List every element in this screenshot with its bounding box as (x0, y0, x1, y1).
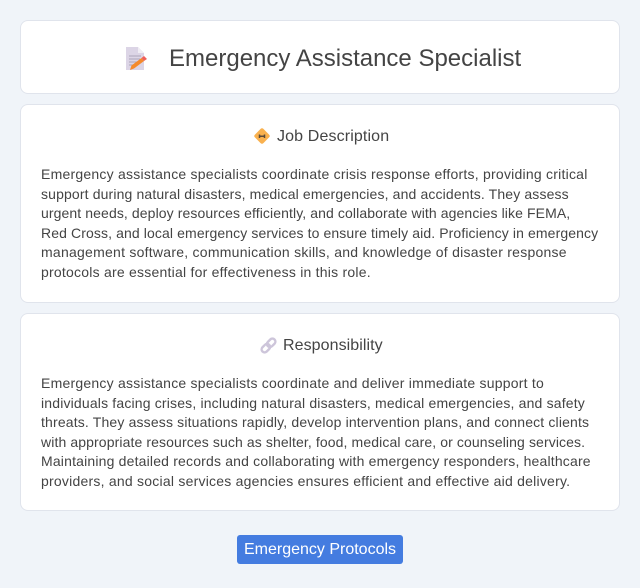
text block: job description: Emergency assistance specialists coordinate crisis response efforts, providing critical (41, 166, 588, 182)
text block: responsibility: providers, and social services agencies ensures efficient and effective aid delivery. (41, 473, 570, 489)
panel: title card (20, 20, 620, 94)
text block: responsibility: Maintaining detailed records and collaborating with emergency responders, healthcare (41, 453, 591, 469)
text block: job description: Red Cross, and local emergency services to ensure timely aid. Proficiency in emergency (41, 225, 598, 241)
text block: job description (41, 166, 598, 280)
heading: job description: Job Description (277, 128, 389, 145)
button: emergency protocols: Emergency Protocols (244, 541, 396, 558)
title: Emergency Assistance Specialist (169, 45, 521, 72)
text block: job description: support during natural disasters, medical emergencies, and accidents. They assess (41, 186, 569, 202)
icon: road sign (254, 128, 270, 144)
text block: job description: management software, communication skills, and knowledge of disaster response (41, 244, 567, 260)
heading: responsibility: Responsibility (283, 337, 383, 354)
icon: document with pencil (126, 47, 147, 70)
text block: job description: protocols are essential for effectiveness in this role. (41, 264, 371, 280)
text block: responsibility: threats. They assess situations rapidly, develop intervention plans, and connect clients (41, 414, 589, 430)
icon: chain link (260, 337, 276, 354)
button: emergency protocols (237, 535, 403, 564)
text block: responsibility: Emergency assistance specialists coordinate and deliver immediate support to (41, 375, 544, 391)
text block: responsibility: with appropriate resources such as shelter, food, medical care, or counseling services. (41, 434, 585, 450)
text block: responsibility: individuals facing crises, including natural disasters, medical emergencies, and safety (41, 395, 585, 411)
text block: job description: urgent needs, deploy resources efficiently, and collaborate with agencies like FEMA, (41, 205, 570, 221)
panel: responsibility (20, 313, 620, 511)
text block: responsibility (41, 375, 591, 489)
panel: job description (20, 104, 620, 303)
